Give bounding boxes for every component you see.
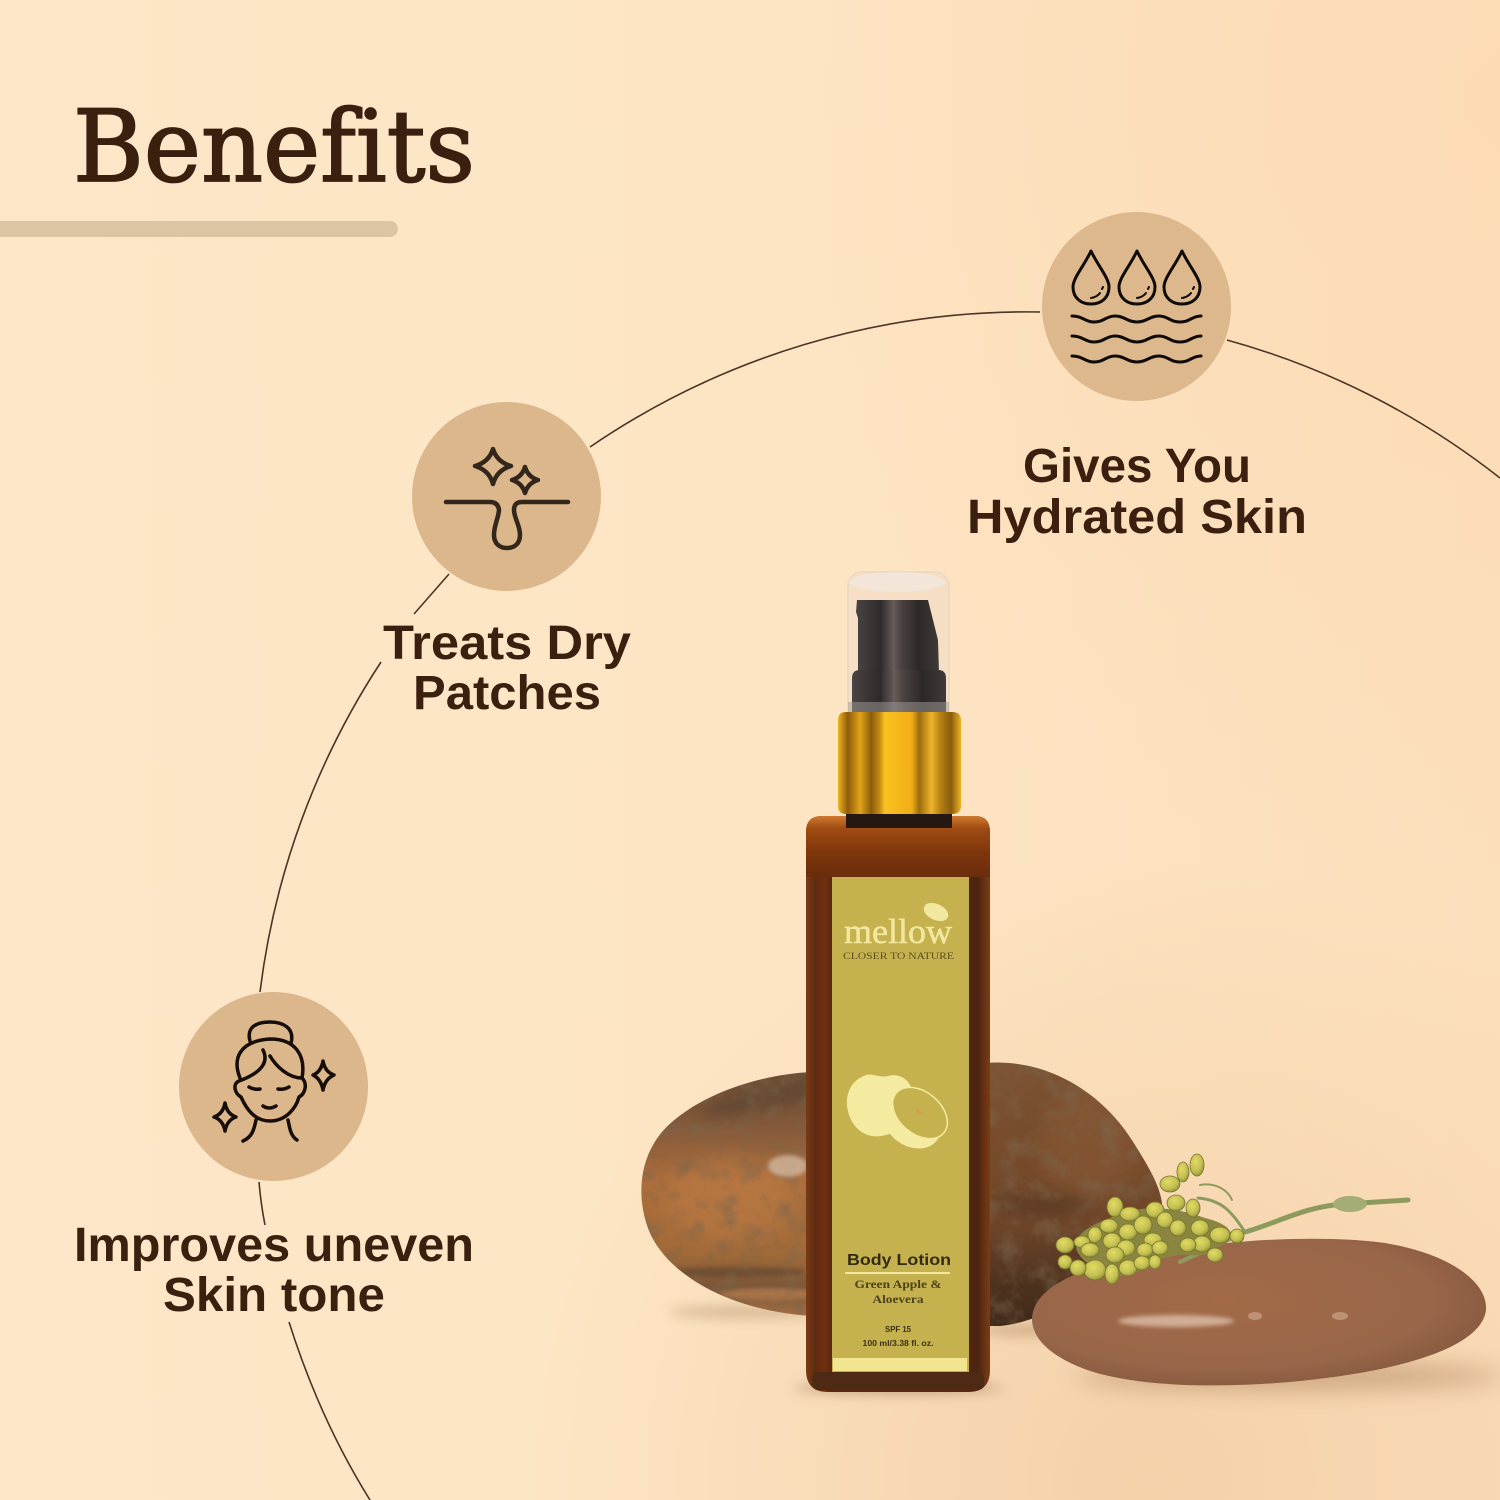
front stone bbox=[1032, 1239, 1486, 1385]
bottle bbox=[806, 572, 990, 1392]
label: treats dry patches: Treats Dry bbox=[383, 617, 631, 670]
bottle neck bbox=[846, 814, 952, 840]
tagline: CLOSER TO NATURE bbox=[843, 952, 954, 962]
icon: water drops and waves bbox=[1042, 212, 1231, 401]
volume: 100 ml/3.38 fl. oz. bbox=[862, 1339, 934, 1348]
right stone bbox=[990, 1062, 1162, 1326]
sprig of green buds bbox=[1056, 1154, 1408, 1284]
benefit: improves uneven skin tone bbox=[74, 992, 474, 1322]
icon: skin pore with sparkles bbox=[412, 402, 601, 591]
variant: Green Apple & bbox=[854, 1277, 942, 1291]
brand name: mellow bbox=[844, 912, 953, 951]
label: treats dry patches: Patches bbox=[413, 667, 601, 720]
label: improves uneven skin tone bbox=[74, 1219, 474, 1322]
benefit: hydrated skin bbox=[967, 212, 1307, 544]
connecting arc bbox=[259, 312, 1500, 1500]
label: gives you hydrated skin: Gives You bbox=[1023, 440, 1251, 493]
gold collar bbox=[838, 712, 961, 814]
label: improves uneven skin tone: Improves uneven bbox=[74, 1219, 474, 1272]
icon: apple bbox=[847, 1075, 957, 1159]
label: gives you hydrated skin: Hydrated Skin bbox=[967, 491, 1307, 544]
benefit: treats dry patches bbox=[383, 402, 631, 720]
label: improves uneven skin tone: Skin tone bbox=[163, 1269, 385, 1322]
label bbox=[832, 877, 969, 1372]
icon: face with sparkles bbox=[179, 992, 368, 1181]
icon: leaf bbox=[921, 899, 951, 925]
label: gives you hydrated skin bbox=[967, 440, 1307, 544]
amber bottle body bbox=[806, 816, 990, 1392]
spf: SPF 15 bbox=[885, 1325, 912, 1334]
floor shadows bbox=[670, 1306, 1500, 1394]
left stone bbox=[641, 1072, 806, 1316]
title underline bar bbox=[0, 221, 398, 237]
title: Benefits bbox=[73, 90, 475, 205]
label: Aloevera bbox=[872, 1292, 924, 1306]
product name: Body Lotion bbox=[847, 1252, 951, 1269]
spray cap: clear dome bbox=[848, 572, 949, 724]
label: treats dry patches bbox=[383, 617, 631, 720]
